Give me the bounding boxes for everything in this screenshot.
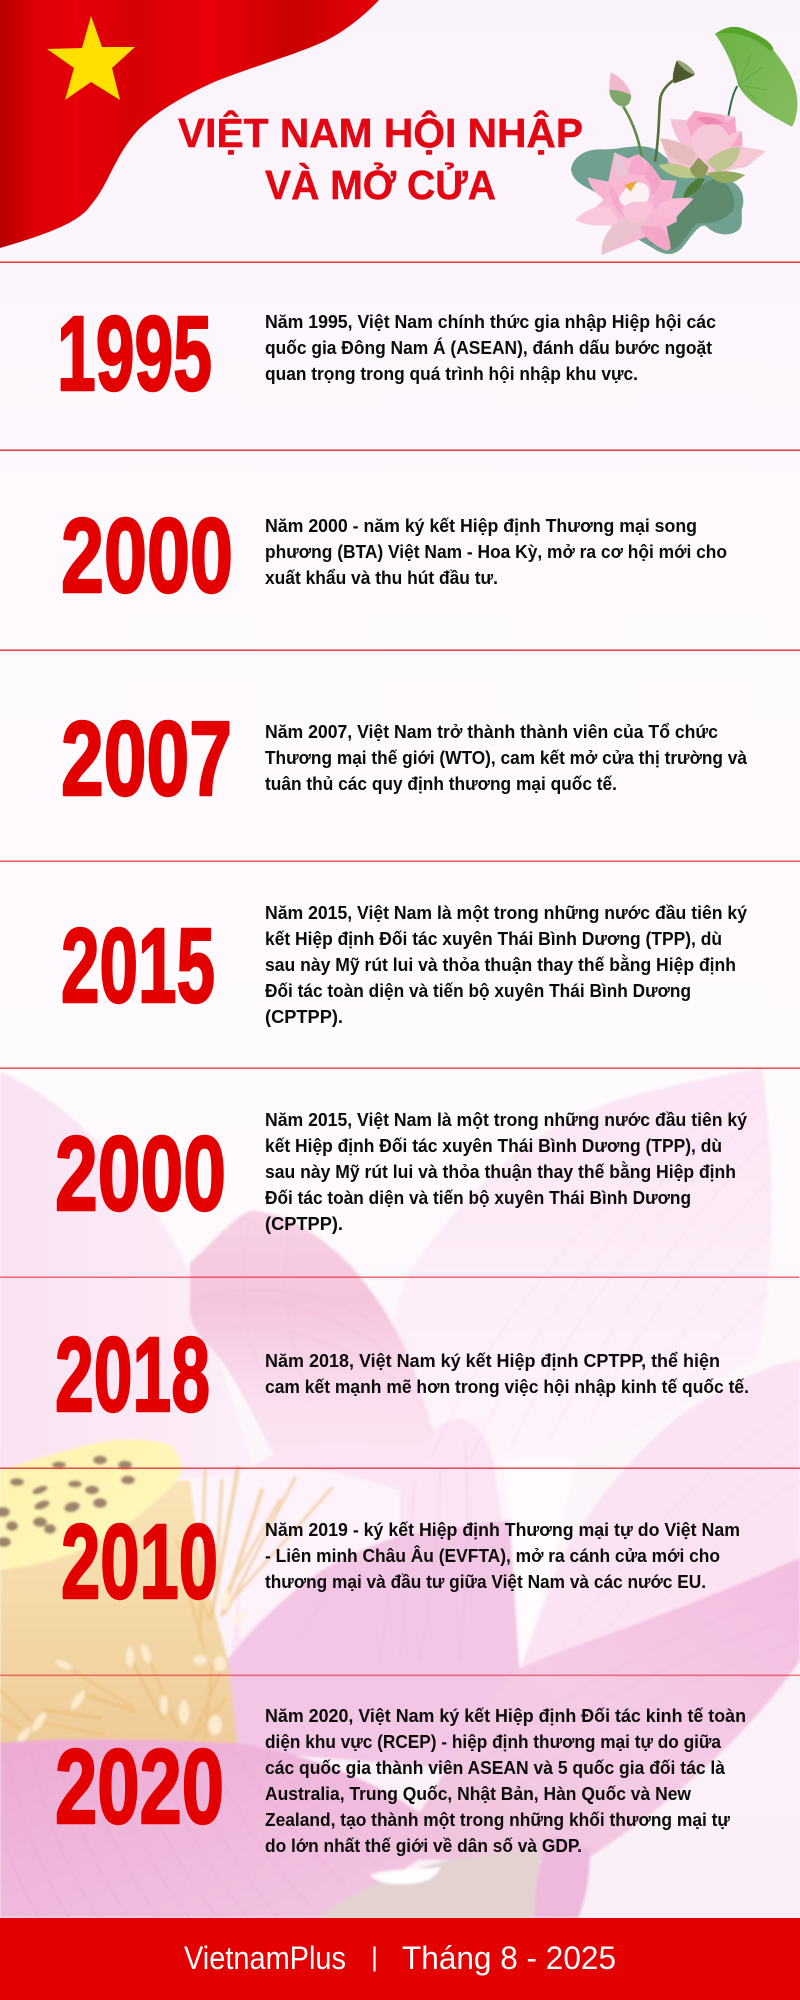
entry: 2000 [61, 497, 727, 615]
year 2020: 2020 [55, 1728, 224, 1846]
description 2000: xuất khẩu và thu hút đầu tư. [265, 567, 498, 588]
description 1995: quan trọng trong quá trình hội nhập khu vực. [265, 363, 638, 384]
description 2000: Năm 2000 - năm ký kết Hiệp định Thương mại song [265, 515, 697, 536]
description 2015: Năm 2015, Việt Nam là một trong những nước đầu tiên ký [265, 902, 748, 923]
description 2019: - Liên minh Châu Âu (EVFTA), mở ra cánh cửa mới cho [265, 1545, 720, 1566]
description 2015: kết Hiệp định Đối tác xuyên Thái Bình Dương (TPP), dù [265, 928, 722, 949]
entry: 2018 [55, 1316, 749, 1434]
description 2015 [265, 902, 748, 1027]
description 2015: (CPTPP). [265, 1006, 343, 1027]
icon: yellow star [47, 16, 135, 100]
footer separator: | [371, 1942, 378, 1972]
lotus pod body [0, 1480, 238, 1750]
stems [623, 107, 642, 157]
description 2019: Năm 2019 - ký kết Hiệp định Thương mại tự do Việt Nam [265, 1519, 740, 1540]
description 2007: Năm 2007, Việt Nam trở thành thành viên của Tổ chức [265, 721, 718, 742]
petal: right strong pink [390, 1558, 800, 1860]
lower flower [575, 153, 693, 255]
description 2020: Năm 2020, Việt Nam ký kết Hiệp định Đối tác kinh tế toàn [265, 1705, 746, 1726]
stamens [0, 1468, 332, 1740]
petal: bottom strip [535, 1835, 590, 1918]
description 2000: phương (BTA) Việt Nam - Hoa Kỳ, mở ra cơ hội mới cho [265, 541, 727, 562]
description 2015: sau này Mỹ rút lui và thỏa thuận thay thế bằng Hiệp định [265, 954, 736, 975]
year 2010: 2010 [61, 1503, 218, 1621]
description second 2000: sau này Mỹ rút lui và thỏa thuận thay thế bằng Hiệp định [265, 1161, 736, 1182]
description second 2000: Đối tác toàn diện và tiến bộ xuyên Thái Bình Dương [265, 1187, 691, 1208]
petal: curled centre [190, 1210, 440, 1510]
entry: 1995 [57, 295, 716, 413]
year 2000 repeated: 2000 [55, 1115, 226, 1233]
description 2007: tuân thủ các quy định thương mại quốc tế. [265, 773, 617, 794]
entry: 2020 [55, 1705, 746, 1856]
description 1995 [265, 311, 716, 384]
description 1995: Năm 1995, Việt Nam chính thức gia nhập Hiệp hội các [265, 311, 716, 332]
description 2018 [265, 1350, 749, 1397]
petal: left pale [0, 1072, 255, 1485]
highlight on petal base [370, 1867, 441, 1884]
description 2020 [265, 1705, 746, 1856]
description second 2000: kết Hiệp định Đối tác xuyên Thái Bình Dương (TPP), dù [265, 1135, 722, 1156]
description 2018: cam kết mạnh mẽ hơn trong việc hội nhập kinh tế quốc tế. [265, 1376, 749, 1397]
upper flower [658, 111, 766, 198]
divider lines [0, 262, 800, 1676]
lily pad [571, 146, 743, 254]
description second 2000 [265, 1109, 748, 1234]
petal: lower left [0, 1739, 455, 1918]
title: VÀ MỞ CỬA [265, 162, 496, 208]
description 2019: thương mại và đầu tư giữa Việt Nam và các nước EU. [265, 1571, 706, 1592]
highlight: white gap [503, 1460, 575, 1665]
description 2020: do lớn nhất thế giới về dân số và GDP. [265, 1835, 582, 1856]
year 2018: 2018 [55, 1316, 210, 1434]
description 2018: Năm 2018, Việt Nam ký kết Hiệp định CPTPP, thể hiện [265, 1350, 720, 1371]
footer date: Tháng 8 - 2025 [402, 1940, 616, 1976]
petal: right middle [517, 1360, 800, 1680]
petal base beige [318, 1848, 540, 1918]
description 2020: Australia, Trung Quốc, Nhật Bản, Hàn Quốc và New [265, 1783, 692, 1804]
footer bar [0, 1918, 800, 2000]
description second 2000: Năm 2015, Việt Nam là một trong những nước đầu tiên ký [265, 1109, 748, 1130]
description 2020: các quốc gia thành viên ASEAN và 5 quốc gia đối tác là [265, 1757, 726, 1778]
petal: centre upper [230, 1418, 517, 1670]
lotus pod top [0, 1439, 182, 1570]
lotus bud [609, 72, 631, 107]
description second 2000: (CPTPP). [265, 1213, 343, 1234]
lily pad shade [650, 178, 734, 250]
year 1995: 1995 [57, 295, 212, 413]
background photo: lotus flower [0, 1068, 800, 1920]
petal veins [0, 1745, 380, 1920]
illustration: lotus flowers [571, 27, 797, 255]
entry: second 2000 [55, 1109, 748, 1234]
description 1995: quốc gia Đông Nam Á (ASEAN), đánh dấu bước ngoặt [265, 337, 712, 358]
description 2007: Thương mại thế giới (WTO), cam kết mở cửa thị trường và [265, 747, 748, 768]
entry: 2015 [61, 902, 748, 1027]
petal: upper right [350, 1068, 771, 1500]
footer source: VietnamPlus [184, 1940, 346, 1976]
year 2007: 2007 [61, 700, 232, 818]
description 2015: Đối tác toàn diện và tiến bộ xuyên Thái Bình Dương [265, 980, 691, 1001]
year 2000: 2000 [61, 497, 233, 615]
title [178, 110, 583, 208]
year 2015: 2015 [61, 907, 215, 1025]
entry: 2007 [61, 700, 748, 818]
lotus seed pod [673, 61, 695, 83]
lotus pod seeds [0, 1456, 135, 1547]
entry: 2010 [61, 1503, 740, 1621]
title: VIỆT NAM HỘI NHẬP [178, 110, 583, 156]
anthers [15, 1590, 251, 1744]
description 2000 [265, 515, 727, 588]
description 2020: Zealand, tạo thành một trong những khối thương mại tự [265, 1809, 731, 1830]
description 2007 [265, 721, 748, 794]
description 2019 [265, 1519, 740, 1592]
highlight: pale area by stamens [240, 1466, 400, 1640]
green leaf [715, 27, 797, 127]
flag banner [0, 0, 379, 248]
description 2020: diện khu vực (RCEP) - hiệp định thương mại tự do giữa [265, 1731, 722, 1752]
petal: centre deep pink [227, 1520, 520, 1770]
